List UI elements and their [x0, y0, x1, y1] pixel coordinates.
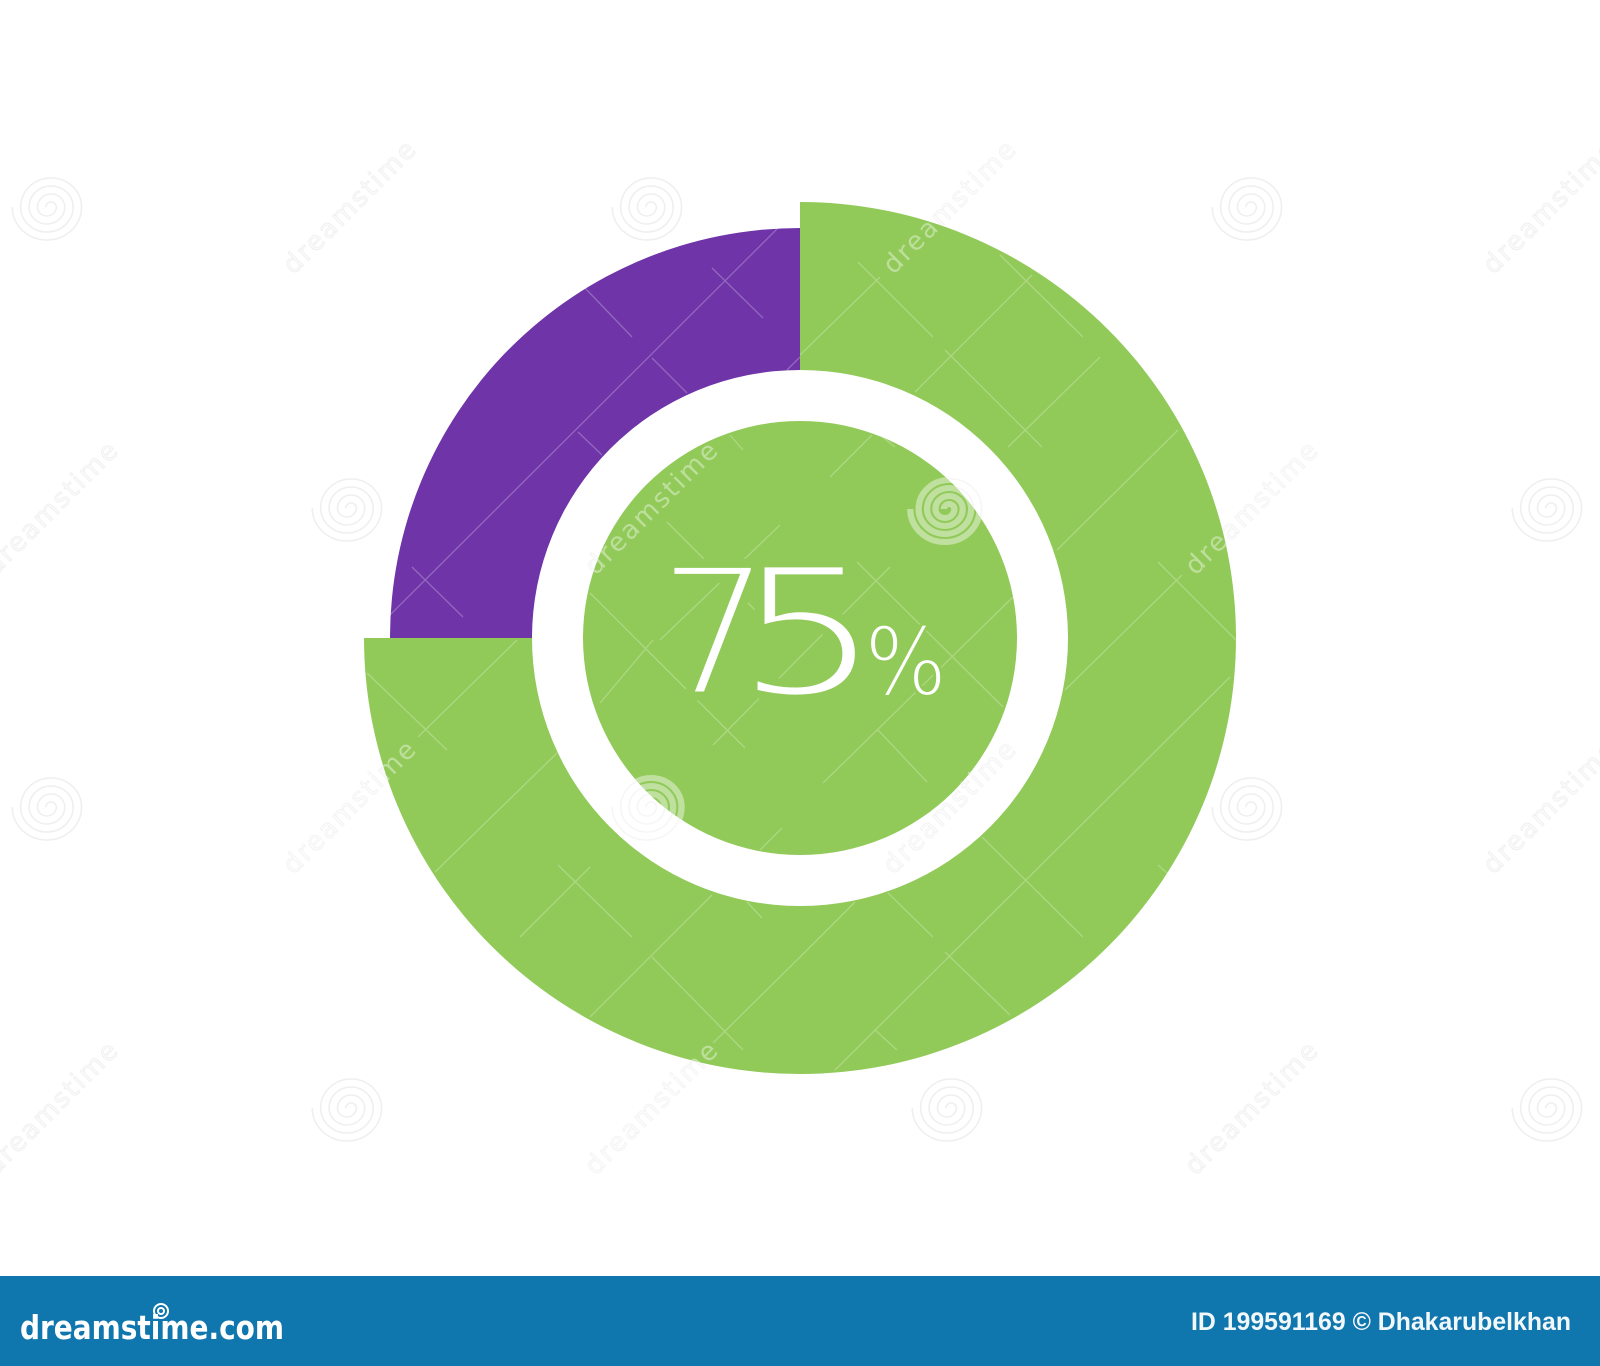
- watermark over chart: text and spirals: dreamstime: [877, 135, 1022, 280]
- green segment: 75%: [364, 202, 1236, 1074]
- purple segment: 25%: [390, 228, 800, 638]
- watermark lines over chart: [367, 228, 1236, 1070]
- center value label: 75%: 5: [735, 527, 880, 739]
- watermark text on white background: dreamstime: [277, 735, 422, 880]
- watermark text on white background: [0, 135, 1600, 1181]
- watermark over chart: text and spirals: [277, 135, 1324, 1181]
- watermark over chart: text and spirals: dreamstime: [1179, 436, 1324, 581]
- center value label: 75%: [655, 527, 946, 739]
- watermark text on white background: dreamstime: [1179, 436, 1324, 581]
- watermark text on white background: dreamstime: [579, 1036, 724, 1181]
- watermark text on white background: dreamstime: [877, 735, 1022, 880]
- watermark text on white background: dreamstime: [877, 135, 1022, 280]
- watermark text on white background: dreamstime: [579, 436, 724, 581]
- footer credit: ID 199591169 © Dhakarubelkhan: [1191, 1308, 1571, 1336]
- footer logo: dreamstime.com: [20, 1308, 284, 1347]
- watermark over chart: text and spirals: dreamstime: [579, 1036, 724, 1181]
- logo spiral icon: [154, 1304, 168, 1318]
- watermark spirals on white background: [12, 178, 1582, 1141]
- center value label: 75%: %: [865, 608, 946, 718]
- watermark over chart: text and spirals: dreamstime: [579, 436, 724, 581]
- watermark over chart: text and spirals: dreamstime: [877, 735, 1022, 880]
- footer bar: [0, 1276, 1600, 1366]
- watermark text on white background: dreamstime: [277, 135, 422, 280]
- donut chart: [364, 202, 1236, 1074]
- center value label: 75%: 7: [655, 527, 771, 739]
- watermark spiral on center disc: [910, 480, 980, 542]
- watermark text on white background: dreamstime: [1179, 1036, 1324, 1181]
- watermark spiral crossing disc edge: [612, 778, 682, 840]
- center disc: [583, 421, 1017, 855]
- watermark over chart: text and spirals: dreamstime: [277, 735, 422, 880]
